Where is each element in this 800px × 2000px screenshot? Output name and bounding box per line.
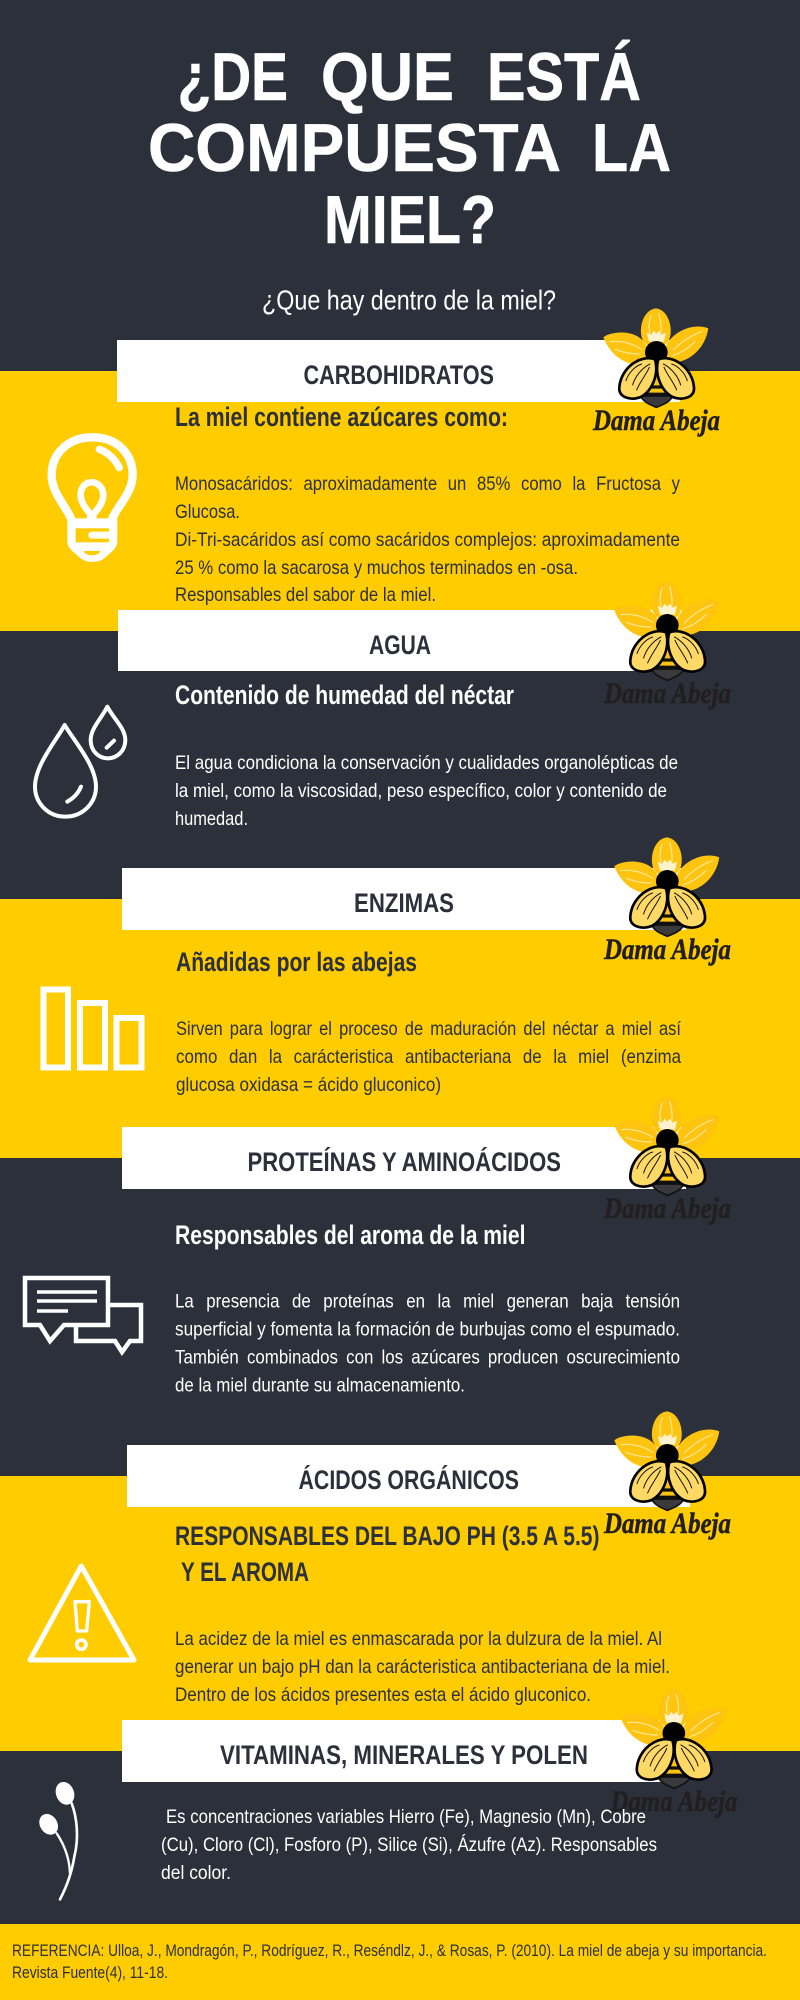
heading bar: vitaminas <box>122 1720 686 1782</box>
text block: enzimas: glucosa oxidasa = ácido gluconico) <box>176 1074 441 1096</box>
text block: enzimas <box>176 947 681 1096</box>
heading: acidos: ÁCIDOS ORGÁNICOS <box>298 1464 519 1495</box>
text block: carbohidratos: La miel contiene azúcares como: <box>175 402 508 432</box>
text block: referencia <box>12 1942 767 1982</box>
title: LA <box>592 110 671 186</box>
text block: proteinas <box>175 1220 680 1396</box>
logo: dama abeja 4: Dama Abeja <box>603 1192 731 1225</box>
logo: dama abeja 4 <box>603 1096 731 1225</box>
logo: dama abeja 1: Dama Abeja <box>592 404 720 437</box>
text block: agua: Contenido de humedad del néctar <box>175 680 514 710</box>
title <box>148 39 671 258</box>
logo: dama abeja 6: Dama Abeja <box>610 1785 738 1818</box>
heading bar: carbohidratos <box>117 340 680 402</box>
text block: agua <box>175 680 678 830</box>
text block: enzimas: Añadidas por las abejas <box>176 947 417 977</box>
title: COMPUESTA <box>148 110 561 186</box>
text block: agua: humedad. <box>175 808 248 830</box>
text block: enzimas: Sirven para lograr el proceso de maduración del néctar a miel así <box>176 1018 681 1040</box>
logo: dama abeja 3 <box>603 837 731 966</box>
logo: dama abeja 3: Dama Abeja <box>603 933 731 966</box>
text block: acidos: Dentro de los ácidos presentes esta el ácido gluconico. <box>175 1684 591 1706</box>
logo: dama abeja 5 <box>603 1411 731 1540</box>
title: QUE <box>321 39 454 115</box>
text block: vitaminas <box>161 1806 657 1884</box>
heading: proteinas: PROTEÍNAS Y AMINOÁCIDOS <box>248 1146 561 1177</box>
icon: chat bubbles <box>25 1278 141 1352</box>
text block: proteinas: de la miel durante su almacenamiento. <box>175 1374 465 1396</box>
heading bar: proteinas <box>122 1127 686 1189</box>
heading: vitaminas: VITAMINAS, MINERALES Y POLEN <box>220 1740 588 1770</box>
text block: enzimas: como dan la carácteristica antibacteriana de la miel (enzima <box>176 1046 681 1068</box>
panel: footer band <box>0 1924 800 2000</box>
text block: carbohidratos: Di-Tri-sacáridos así como sacáridos complejos: aproximadamente <box>175 529 680 551</box>
panel: carbohidratos band <box>0 371 800 631</box>
text block: referencia: Revista Fuente(4), 11-18. <box>12 1964 168 1982</box>
logo: dama abeja 2: Dama Abeja <box>603 677 731 710</box>
text block: carbohidratos <box>175 402 680 606</box>
text block: carbohidratos: 25 % como la sacarosa y muchos terminados en -osa. <box>175 557 578 579</box>
text block: acidos: La acidez de la miel es enmascarada por la dulzura de la miel. Al <box>175 1628 662 1650</box>
logo: dama abeja 1 <box>592 308 720 437</box>
text block: proteinas: superficial y fomenta la formación de burbujas como el espumado. <box>175 1318 680 1340</box>
title: ESTÁ <box>487 39 641 115</box>
panel: enzimas band <box>0 899 800 1158</box>
text block: vitaminas: del color. <box>161 1862 231 1884</box>
icon: bar columns <box>44 990 142 1068</box>
text block: acidos: generar un bajo pH dan la carácteristica antibacteriana de la miel. <box>175 1656 670 1678</box>
logo: dama abeja 2 <box>603 581 731 710</box>
text block: proteinas: También combinados con los azúcares producen oscurecimiento <box>175 1346 680 1368</box>
text block: acidos: Y EL AROMA <box>181 1557 309 1587</box>
text block: vitaminas: (Cu), Cloro (Cl), Fosforo (P), Silice (Si), Ázufre (Az). Responsables <box>161 1833 657 1856</box>
text block: agua: la miel, como la viscosidad, peso específico, color y contenido de <box>175 780 667 802</box>
heading: enzimas: ENZIMAS <box>354 888 454 918</box>
text block: proteinas: La presencia de proteínas en la miel generan baja tensión <box>175 1290 680 1312</box>
logo: dama abeja 5: Dama Abeja <box>603 1507 731 1540</box>
icon: water drops <box>35 707 125 817</box>
text block: agua: El agua condiciona la conservación y cualidades organolépticas de <box>175 752 678 774</box>
text block: acidos <box>175 1521 670 1706</box>
icon: warning triangle <box>30 1566 134 1660</box>
heading bar: agua <box>118 610 682 671</box>
heading bar: enzimas <box>122 868 686 930</box>
heading: carbohidratos: CARBOHIDRATOS <box>304 360 494 390</box>
subtitle: ¿Que hay dentro de la miel? <box>262 284 556 316</box>
text block: acidos: RESPONSABLES DEL BAJO PH (3.5 A 5.5) <box>175 1521 600 1551</box>
text block: vitaminas: Es concentraciones variables Hierro (Fe), Magnesio (Mn), Cobre <box>166 1806 646 1828</box>
icon: plant sprout <box>35 1779 77 1899</box>
icon: light bulb <box>52 437 133 562</box>
panel: acidos organicos band <box>0 1476 800 1751</box>
heading bar: acidos <box>127 1445 690 1507</box>
text block: carbohidratos: Glucosa. <box>175 501 240 523</box>
logo: dama abeja 6 <box>610 1689 738 1818</box>
text block: carbohidratos: Responsables del sabor de la miel. <box>175 584 436 606</box>
text block: carbohidratos: Monosacáridos: aproximadamente un 85% como la Fructosa y <box>175 473 680 495</box>
text block: proteinas: Responsables del aroma de la miel <box>175 1220 526 1250</box>
title: ¿DE <box>178 39 288 115</box>
heading: agua: AGUA <box>369 630 431 660</box>
title: MIEL? <box>324 182 496 258</box>
